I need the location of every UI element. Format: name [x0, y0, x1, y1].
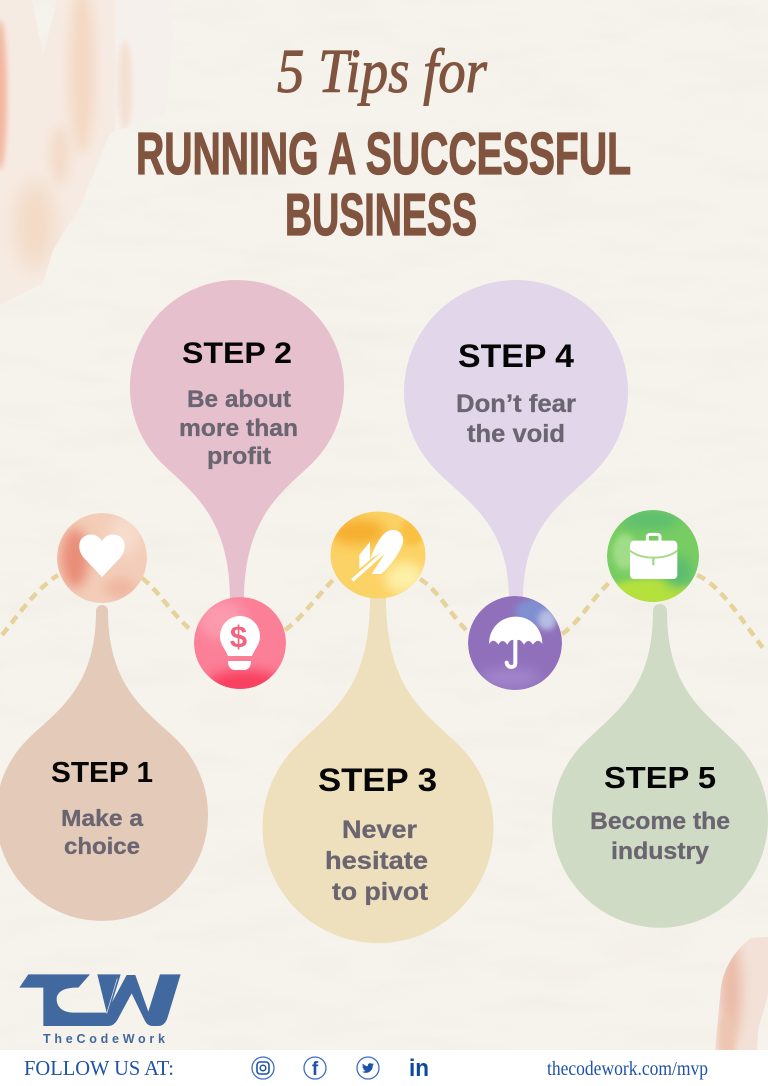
decoration: bottom-right watercolor wash — [715, 937, 768, 1050]
step 4 description: the void — [467, 420, 565, 448]
panel: step 2 drop — [130, 280, 344, 600]
step 3 description: hesitate — [325, 847, 428, 875]
step 2 description — [179, 386, 298, 470]
step 1 heading: STEP 1 — [51, 757, 153, 789]
step 1 description: choice — [64, 833, 140, 859]
panel: step 1 drop — [0, 605, 208, 921]
icon: briefcase in green watercolor circle — [607, 510, 699, 605]
step 1 description — [61, 805, 143, 859]
step 3 heading: STEP 3 — [318, 762, 437, 798]
step 5 description: industry — [611, 838, 710, 865]
connector: dashed wave line — [2, 575, 766, 652]
icon: linkedin: in — [409, 1055, 429, 1082]
icon: twitter — [357, 1057, 379, 1079]
step 5 description — [590, 808, 730, 865]
icon: facebook — [304, 1057, 326, 1080]
icon: instagram — [252, 1057, 274, 1079]
panel: step 3 drop — [262, 598, 494, 943]
step 2 description: profit — [207, 443, 271, 470]
icon: dollar light bulb in pink watercolor circle: $ — [230, 619, 247, 654]
logo: TheCodeWork — [19, 974, 181, 1046]
icon: feather in yellow watercolor circle — [330, 512, 426, 598]
step 2 heading: STEP 2 — [182, 337, 292, 370]
icon: umbrella in purple watercolor circle — [468, 596, 562, 690]
step 4 description: Don’t fear — [456, 390, 576, 418]
icon: facebook: f — [312, 1059, 319, 1080]
step 3 description — [325, 816, 429, 906]
step 1 description: Make a — [61, 805, 143, 831]
logo wordmark: TheCodeWork — [43, 1032, 165, 1046]
icon: heart in coral watercolor circle — [57, 513, 147, 603]
step 3 description: to pivot — [332, 878, 429, 906]
step 3 description: Never — [342, 816, 417, 844]
footer bar — [0, 1050, 768, 1086]
decoration: top-left watercolor wash — [0, 0, 134, 301]
step 2 description: Be about — [187, 386, 291, 413]
step 4 description — [456, 390, 576, 448]
icon: dollar light bulb in pink watercolor circle — [194, 597, 286, 698]
panel: step 4 drop — [404, 280, 628, 600]
step 5 description: Become the — [590, 808, 730, 835]
step 2 description: more than — [179, 415, 298, 442]
panel: step 5 drop — [552, 604, 768, 928]
logo mark — [19, 974, 181, 1026]
footer label: follow us: FOLLOW US AT: — [24, 1056, 174, 1080]
title: line two: BUSINESS — [285, 182, 477, 248]
footer link: website: thecodework.com/mvp — [547, 1058, 708, 1080]
step 4 heading: STEP 4 — [458, 338, 574, 374]
step 5 heading: STEP 5 — [604, 760, 716, 795]
subtitle: 5 Tips for: 5 Tips for — [277, 38, 488, 106]
